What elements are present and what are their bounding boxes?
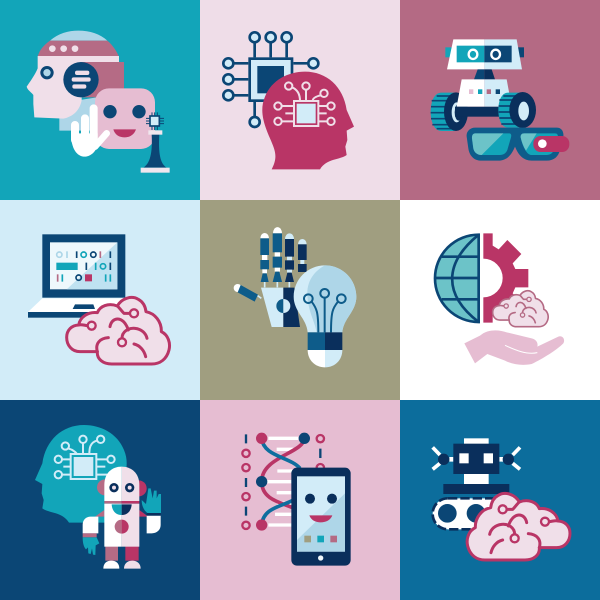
icon: laptop: [28, 234, 140, 318]
panel: head and friendly robot: [0, 400, 200, 600]
icon: DNA helix: [256, 433, 310, 531]
panel: robotic hand and bulb: [200, 200, 400, 400]
panel: AI face and chess: [0, 0, 200, 200]
icon: open hand: [464, 330, 564, 365]
icon: brain: [67, 297, 170, 364]
icon: head chip: [55, 436, 115, 479]
icon: smart glasses: [467, 128, 563, 161]
icon: teal head: [35, 425, 127, 523]
icon: half gear: [483, 233, 528, 323]
icon: smartphone with face: [291, 468, 351, 566]
icon: brain: [467, 493, 570, 560]
icon: binary column: [242, 434, 324, 529]
icon: tracked robot: [433, 438, 520, 529]
icon: circuit chip: [223, 32, 318, 127]
panel: DNA and smartphone: [200, 400, 400, 600]
icon: light bulb: [294, 265, 356, 367]
icon: wheeled robot: [431, 39, 536, 131]
panel: head with circuit: [200, 0, 400, 200]
icon: smiling robot face: [95, 88, 155, 149]
icon: head chip: [274, 82, 335, 126]
icon: magenta head: [262, 72, 354, 169]
panel: laptop and brain: [0, 200, 200, 400]
icon: robotic hand: [234, 227, 307, 327]
panel: tracked robot and brain: [400, 400, 600, 600]
icon: waving robot: [83, 467, 161, 569]
icon: small brain: [493, 291, 548, 327]
icon: white hand: [71, 108, 107, 157]
chart: binary code on screen: [56, 251, 110, 282]
panel: globe gear and hand: [400, 200, 600, 400]
icon: robot head profile: [27, 31, 124, 131]
panel: robot and smart glasses: [400, 0, 600, 200]
icon: chess piece with chip: [141, 112, 170, 173]
icon: half globe: [435, 235, 479, 322]
icon: toggle switch: [533, 136, 569, 152]
